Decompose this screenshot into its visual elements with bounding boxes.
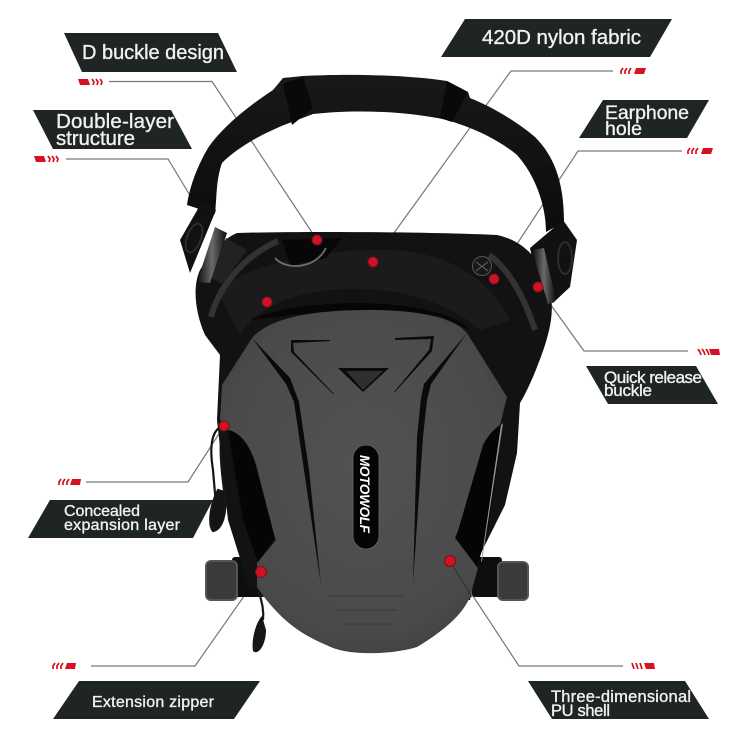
callout: Earphone hole xyxy=(579,100,713,154)
leader line: Quick release buckle xyxy=(538,287,688,351)
callout: Three-dimensional PU shell: Three-dimensional xyxy=(551,688,691,706)
icon: red arrow marker xyxy=(53,663,76,669)
right quick release buckle xyxy=(530,220,577,304)
callout: Double-layer structure: Double-layer xyxy=(56,110,174,133)
icon: red arrow marker xyxy=(698,349,720,355)
callout: Double-layer structure: structure xyxy=(56,127,135,150)
leader line: Earphone hole xyxy=(494,151,682,279)
hard PU shell xyxy=(220,310,507,653)
left quick release buckle xyxy=(180,200,247,284)
D ring buckle xyxy=(275,238,342,266)
icon: red arrow marker xyxy=(78,79,102,85)
leader over shell xyxy=(450,561,472,597)
concealed expansion cords xyxy=(210,426,226,531)
left webbing xyxy=(211,241,278,317)
right webbing xyxy=(489,255,535,330)
leader line: Extension zipper xyxy=(91,572,261,666)
callout: Extension zipper xyxy=(53,663,260,719)
MOTOWOLF logo badge xyxy=(353,445,379,549)
shoulder strap xyxy=(187,75,564,232)
shell ridge lines xyxy=(328,596,403,624)
callout: Extension zipper: Extension zipper xyxy=(92,694,215,711)
shell windows xyxy=(228,423,503,567)
callout: Earphone hole: Earphone xyxy=(605,102,689,124)
fabric body xyxy=(196,232,552,600)
leader line: 420D nylon fabric xyxy=(373,71,613,262)
extension zipper pull xyxy=(253,592,266,652)
callout: Earphone hole: hole xyxy=(605,118,642,140)
shell grooves xyxy=(252,333,467,585)
callout: D buckle design xyxy=(64,33,237,85)
bag product illustration xyxy=(180,75,577,653)
callout: 420D nylon fabric xyxy=(441,19,672,74)
marker dots xyxy=(219,235,543,578)
leader line: D buckle design xyxy=(109,82,317,240)
callout: Three-dimensional PU shell xyxy=(528,663,709,720)
icon: red arrow marker xyxy=(632,663,655,669)
callout: Concealed expansion layer: Concealed xyxy=(64,503,140,520)
callout: Three-dimensional PU shell: PU shell xyxy=(551,702,610,720)
callout: Double-layer structure xyxy=(33,110,192,162)
icon: red arrow marker xyxy=(34,156,58,162)
callout: Quick release buckle: Quick release xyxy=(604,368,702,387)
side waist straps xyxy=(206,557,528,600)
MOTOWOLF logo badge: MOTOWOLF xyxy=(357,455,372,534)
leader line: Double-layer structure xyxy=(66,159,200,212)
callout: Concealed expansion layer: expansion layer xyxy=(64,517,181,534)
earphone hole xyxy=(472,256,492,276)
icon: red arrow marker xyxy=(621,68,646,74)
callout: 420D nylon fabric: 420D nylon fabric xyxy=(482,26,641,49)
icon: red arrow marker xyxy=(59,479,81,485)
leader line: Concealed expansion layer xyxy=(86,426,224,482)
callout: D buckle design: D buckle design xyxy=(82,42,224,64)
callout: Quick release buckle xyxy=(586,349,720,404)
callout: Concealed expansion layer xyxy=(28,479,213,538)
leader line: Three-dimensional PU shell xyxy=(450,561,623,666)
icon: red arrow marker xyxy=(688,148,713,154)
callout: Quick release buckle: buckle xyxy=(604,381,652,400)
